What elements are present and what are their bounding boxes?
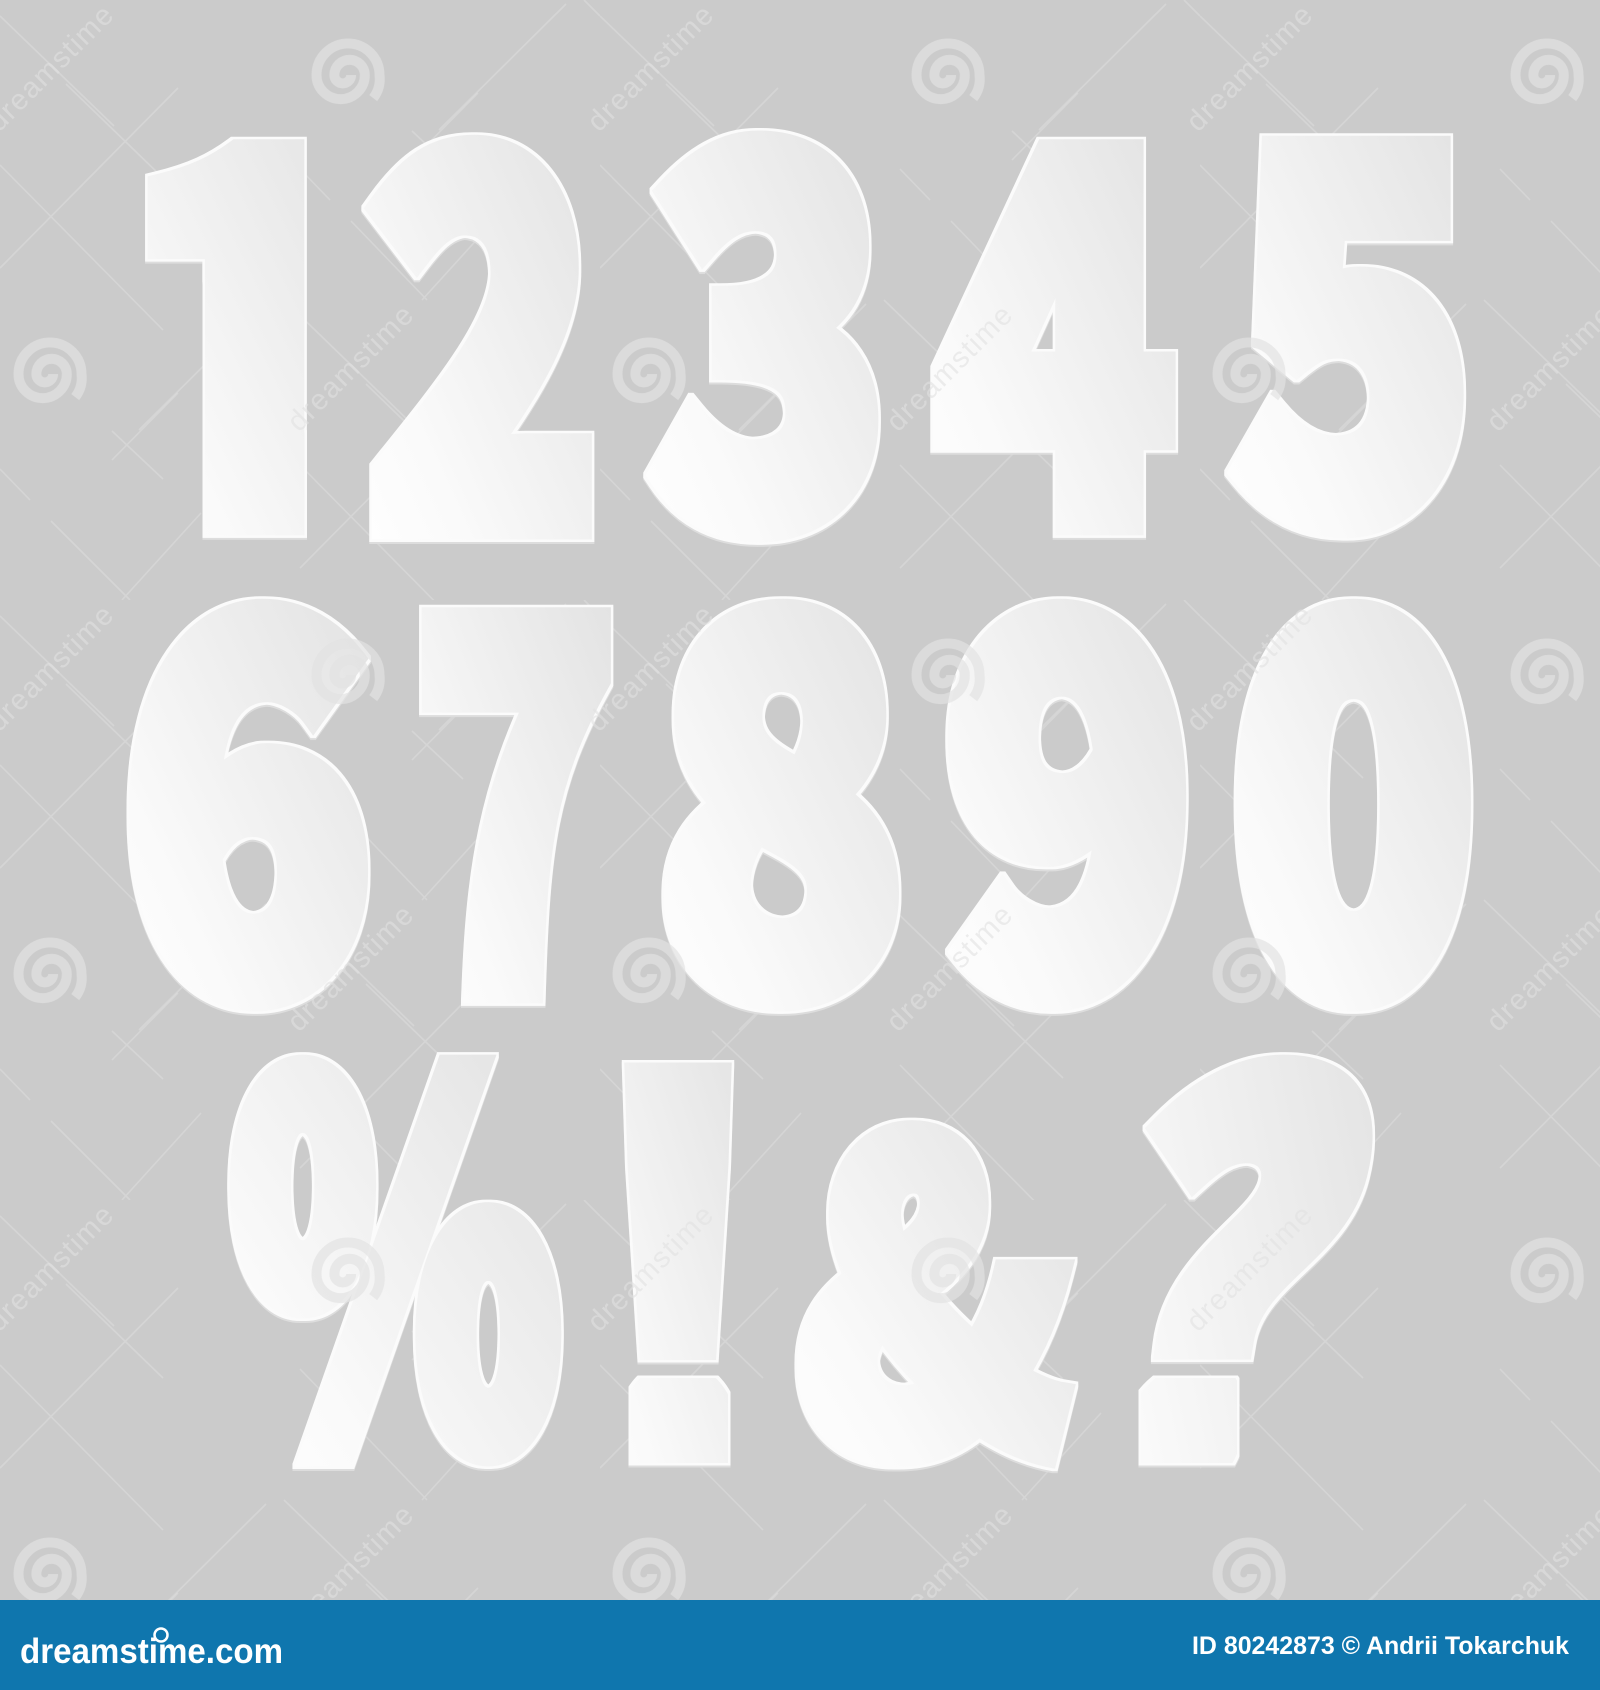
- watermark text: dreamstime: [581, 598, 721, 738]
- watermark text: dreamstime: [1180, 1198, 1320, 1338]
- watermark text: dreamstime: [880, 298, 1020, 438]
- digit 7: 7: [415, 404, 617, 1134]
- watermark text: dreamstime: [281, 1498, 421, 1638]
- ampersand: &: [798, 966, 1070, 1570]
- watermark text: dreamstime: [281, 898, 421, 1038]
- footer banner: [0, 1600, 1600, 1690]
- watermark text: dreamstime: [880, 1498, 1020, 1638]
- exclamation mark: !: [590, 868, 766, 1643]
- logo text: dreamstime.com: [20, 1632, 283, 1671]
- percent sign: %: [230, 871, 561, 1588]
- digit 9: 9: [944, 401, 1194, 1135]
- icon: logo spiral: [154, 1628, 168, 1642]
- watermark text: dreamstime: [1180, 598, 1320, 738]
- watermark text: dreamstime: [281, 298, 421, 438]
- digit 8: 8: [656, 401, 906, 1135]
- question mark: ?: [1014, 867, 1452, 1642]
- watermark text: dreamstime: [880, 898, 1020, 1038]
- image id and author credit: ID 80242873 © Andrii Tokarchuk: [1192, 1632, 1569, 1660]
- watermark text: dreamstime: [581, 0, 721, 138]
- digit 6: 6: [122, 401, 372, 1135]
- watermark text: dreamstime: [581, 1198, 721, 1338]
- digit 0: 0: [1232, 401, 1475, 1136]
- glyph set: numerals and symbols: [126, 128, 1474, 1473]
- watermark text: dreamstime: [1180, 0, 1320, 138]
